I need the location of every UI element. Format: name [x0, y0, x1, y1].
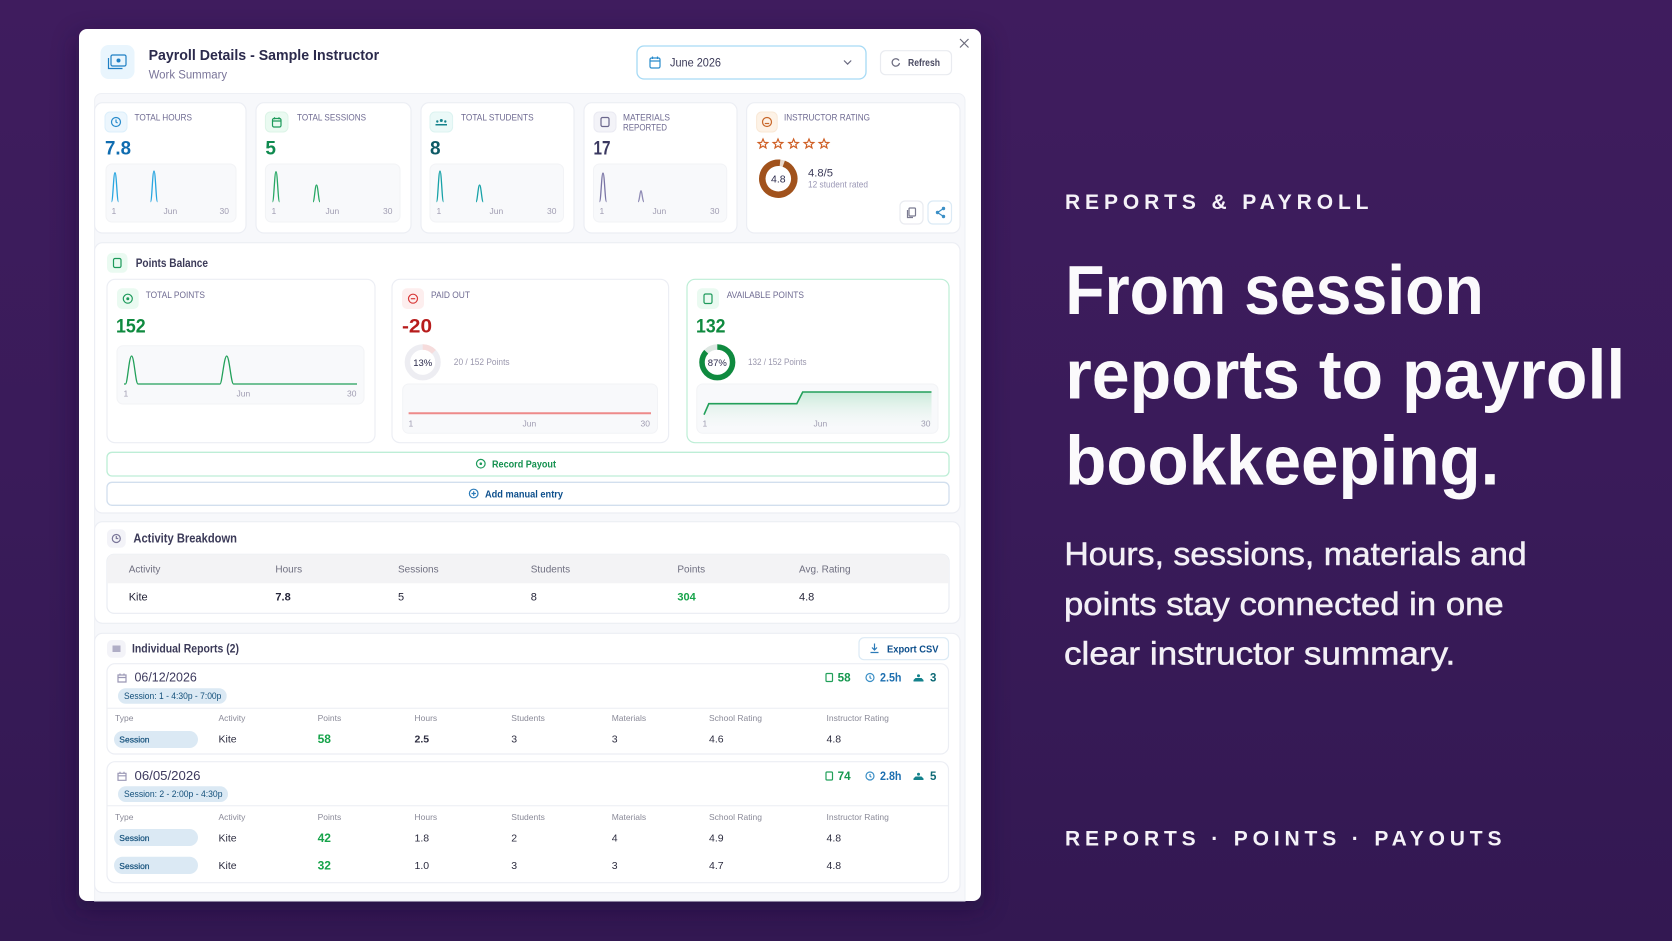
report: 06/12/2026: Points: [318, 713, 341, 723]
sparkline: [430, 164, 564, 222]
sparkline: 30: [547, 206, 557, 216]
icon: paid out: [402, 288, 424, 309]
stat card: materials reported: 17: [594, 139, 610, 160]
line chart: paid out: Jun: [522, 419, 536, 429]
table: activity: 7.8: [275, 591, 291, 603]
stat card: total hours: 7.8: [105, 139, 131, 160]
report: 06/05/2026: 32: [318, 859, 331, 873]
sparkline: 1: [436, 206, 442, 216]
headline: From session: [1065, 251, 1484, 329]
close icon: [960, 39, 968, 48]
headline: [1065, 251, 1625, 499]
report: 06/12/2026: Activity: [218, 713, 246, 723]
icon: calendar: [118, 674, 126, 682]
icon: activity: [107, 529, 126, 548]
report: 06/12/2026: 4.6: [709, 733, 724, 745]
donut: available points: 87%: [708, 358, 727, 369]
card: paid out: -20: [402, 317, 432, 338]
report: 06/12/2026: 3: [612, 733, 618, 745]
report: 06/12/2026: Instructor Rating: [826, 713, 889, 723]
area chart: available points: 30: [921, 419, 931, 429]
sparkline: Jun: [652, 206, 666, 216]
icon: points: [107, 253, 128, 273]
rating donut: 4.8: [771, 174, 786, 186]
area chart: available points: 1: [702, 419, 708, 429]
table: activity: Students: [531, 564, 570, 575]
stat card: instructor rating: 12 student rated: [808, 180, 868, 190]
stat card: instructor rating: 4.8/5: [808, 168, 833, 180]
stat card: materials reported: MATERIALS: [623, 113, 670, 123]
rating donut: [758, 158, 799, 199]
report: 06/05/2026: 4.8: [826, 860, 841, 872]
share button: [928, 201, 952, 224]
description: clear instructor summary.: [1064, 636, 1455, 672]
stat card: total hours: TOTAL HOURS: [134, 113, 192, 123]
report: 06/05/2026: Points: [318, 812, 341, 822]
sparkline: 1: [272, 206, 276, 216]
button: record payout: Record Payout: [492, 459, 556, 471]
report: 06/05/2026: 5: [930, 771, 937, 783]
sparkline: 30: [220, 206, 229, 216]
card: paid out: [392, 279, 669, 443]
card: available points: AVAILABLE POINTS: [727, 290, 804, 300]
sparkline: 1: [600, 206, 604, 216]
headline: reports to payroll: [1065, 336, 1625, 414]
stat card: instructor rating: [747, 103, 960, 233]
panel: payroll details window: [79, 29, 981, 901]
card shadow: [76, 36, 984, 910]
card: paid out: 20 / 152 Points: [454, 357, 510, 367]
report: 06/12/2026: 4.8: [826, 733, 841, 745]
icon: available points: [697, 288, 719, 309]
report: 06/05/2026: Session: [119, 861, 150, 871]
report: 06/12/2026: Session: 1 - 4:30p - 7:00p: [124, 691, 221, 701]
donut: paid out: 13%: [413, 358, 433, 369]
description: [1064, 536, 1527, 672]
icon: materials: [594, 112, 616, 132]
report: 06/12/2026: Hours: [414, 713, 437, 723]
report: 06/05/2026: 42: [318, 831, 331, 845]
line chart: paid out: 1: [408, 419, 414, 429]
card: paid out: PAID OUT: [431, 290, 470, 300]
line chart: total points: 1: [124, 389, 128, 399]
report: 06/05/2026: Materials: [612, 812, 646, 822]
table: activity: Activity: [129, 564, 160, 575]
area chart: available points: Jun: [814, 419, 827, 429]
stat card: materials reported: [584, 103, 737, 233]
stat card: total sessions: 5: [265, 139, 276, 160]
export button: [859, 638, 948, 660]
table: activity: Avg. Rating: [799, 564, 851, 575]
sparkline: [594, 164, 727, 222]
heading: Points Balance: [136, 258, 208, 270]
report: 06/05/2026: [107, 762, 948, 883]
card: total points: TOTAL POINTS: [146, 290, 205, 300]
sparkline: Jun: [326, 206, 339, 216]
area chart: available points: [697, 384, 938, 433]
table: activity: [107, 554, 949, 613]
panel: activity breakdown: [95, 522, 960, 623]
report: 06/12/2026: 3: [511, 733, 517, 745]
report: 06/05/2026: 4: [612, 832, 618, 844]
heading: Individual Reports (2): [132, 641, 239, 655]
table: activity: Hours: [275, 564, 302, 575]
button: add manual entry: [107, 482, 949, 505]
heading: Activity Breakdown: [133, 531, 237, 545]
report: 06/12/2026: 2.5: [414, 733, 429, 745]
stat card: total students: [421, 103, 574, 233]
stat card: total students: TOTAL STUDENTS: [461, 113, 534, 123]
stat card: total hours: [95, 103, 246, 233]
report: 06/05/2026: 74: [838, 771, 851, 783]
report: 06/12/2026: 58: [318, 732, 331, 746]
icon: rating: [757, 112, 777, 132]
card: available points: 132 / 152 Points: [748, 357, 807, 367]
sparkline: 1: [112, 206, 116, 216]
report: 06/05/2026: 1.8: [414, 832, 429, 844]
report: 06/05/2026: Kite: [218, 860, 237, 872]
report: 06/05/2026: 1.0: [414, 860, 429, 872]
report: 06/12/2026: 06/12/2026: [134, 671, 197, 685]
refresh button: Refresh: [908, 57, 940, 69]
header icon: [100, 45, 134, 79]
report: 06/12/2026: Kite: [218, 733, 237, 745]
report: 06/05/2026: 06/05/2026: [134, 769, 201, 783]
panel: individual reports: [95, 633, 960, 893]
report: 06/05/2026: Instructor Rating: [826, 812, 889, 822]
report: 06/05/2026: 3: [612, 860, 618, 872]
footer tags: REPORTS · POINTS · PAYOUTS: [1065, 827, 1502, 850]
refresh button: [880, 51, 952, 75]
table: activity: Sessions: [398, 564, 439, 575]
table: activity: 304: [677, 591, 697, 603]
report: 06/05/2026: School Rating: [709, 812, 762, 822]
donut: paid out: [407, 347, 438, 378]
report: 06/12/2026: Students: [511, 713, 545, 723]
table: activity: Kite: [129, 591, 148, 603]
report: 06/05/2026: 2: [511, 832, 517, 844]
icon: people: [430, 112, 453, 132]
table: activity: 4.8: [799, 591, 814, 603]
sparkline: [265, 164, 400, 222]
stat card: total students: 8: [430, 139, 441, 160]
report: 06/05/2026: Session: 2 - 2:00p - 4:30p: [124, 789, 222, 799]
report: 06/05/2026: Kite: [218, 832, 237, 844]
subtitle: Work Summary: [149, 70, 227, 82]
line chart: paid out: 30: [640, 419, 650, 429]
line chart: total points: Jun: [236, 389, 250, 399]
icon: clock: [105, 112, 127, 132]
button: add manual entry: Add manual entry: [485, 489, 563, 501]
report: 06/05/2026: Type: [115, 812, 134, 822]
report: 06/05/2026: Students: [511, 812, 545, 822]
line chart: paid out: [403, 384, 658, 433]
report: 06/05/2026: Session: [119, 833, 150, 843]
line chart: total points: [117, 346, 364, 404]
button: record payout: [107, 452, 949, 476]
card: total points: [107, 279, 375, 443]
report: 06/12/2026: 3: [930, 673, 936, 685]
sparkline: 30: [710, 206, 720, 216]
sparkline: 30: [383, 206, 393, 216]
report: 06/05/2026: 4.9: [709, 832, 724, 844]
stat card: materials reported: REPORTED: [623, 123, 667, 133]
report: 06/05/2026: 4.8: [826, 832, 841, 844]
donut: available points: [702, 347, 733, 378]
description: points stay connected in one: [1064, 586, 1504, 622]
export button: Export CSV: [887, 643, 938, 655]
report: 06/12/2026: Materials: [612, 713, 646, 723]
report: 06/12/2026: Session: [119, 734, 150, 744]
eyebrow: REPORTS & PAYROLL: [1065, 191, 1369, 214]
stat card: total sessions: TOTAL SESSIONS: [297, 113, 366, 123]
stat card: total sessions: [256, 103, 411, 233]
month dropdown: June 2026: [670, 56, 721, 70]
icon: calendar: [265, 112, 288, 132]
line chart: total points: 30: [347, 389, 357, 399]
description: Hours, sessions, materials and: [1064, 536, 1527, 572]
report: 06/05/2026: 2.8h: [880, 771, 902, 783]
icon: total points: [117, 288, 139, 309]
card: available points: [687, 279, 949, 443]
report: 06/05/2026: 4.7: [709, 860, 724, 872]
report: 06/05/2026: Hours: [414, 812, 437, 822]
title: Payroll Details - Sample Instructor: [149, 47, 379, 64]
report: 06/05/2026: 3: [511, 860, 517, 872]
table: activity: Points: [677, 564, 705, 575]
panel: points balance: [95, 243, 960, 513]
report: 06/12/2026: 2.5h: [880, 673, 902, 685]
report: 06/12/2026: School Rating: [709, 713, 762, 723]
sparkline: Jun: [164, 206, 177, 216]
stat card: instructor rating: INSTRUCTOR RATING: [784, 113, 870, 123]
month dropdown: [637, 46, 866, 79]
copy button: [900, 201, 923, 224]
icon: reports: [107, 640, 126, 658]
card: total points: 152: [116, 317, 146, 338]
table: activity: 5: [398, 591, 404, 603]
report: 06/12/2026: Type: [115, 713, 134, 723]
table: activity: 8: [531, 591, 537, 603]
card: available points: 132: [696, 317, 726, 338]
sparkline: Jun: [490, 206, 503, 216]
headline: bookkeeping.: [1065, 421, 1499, 499]
report: 06/12/2026: 58: [838, 673, 851, 685]
star rating: [758, 139, 829, 148]
icon: calendar: [118, 772, 126, 780]
report: 06/05/2026: Activity: [218, 812, 246, 822]
report: 06/12/2026: [107, 664, 948, 754]
sparkline: [106, 164, 236, 222]
